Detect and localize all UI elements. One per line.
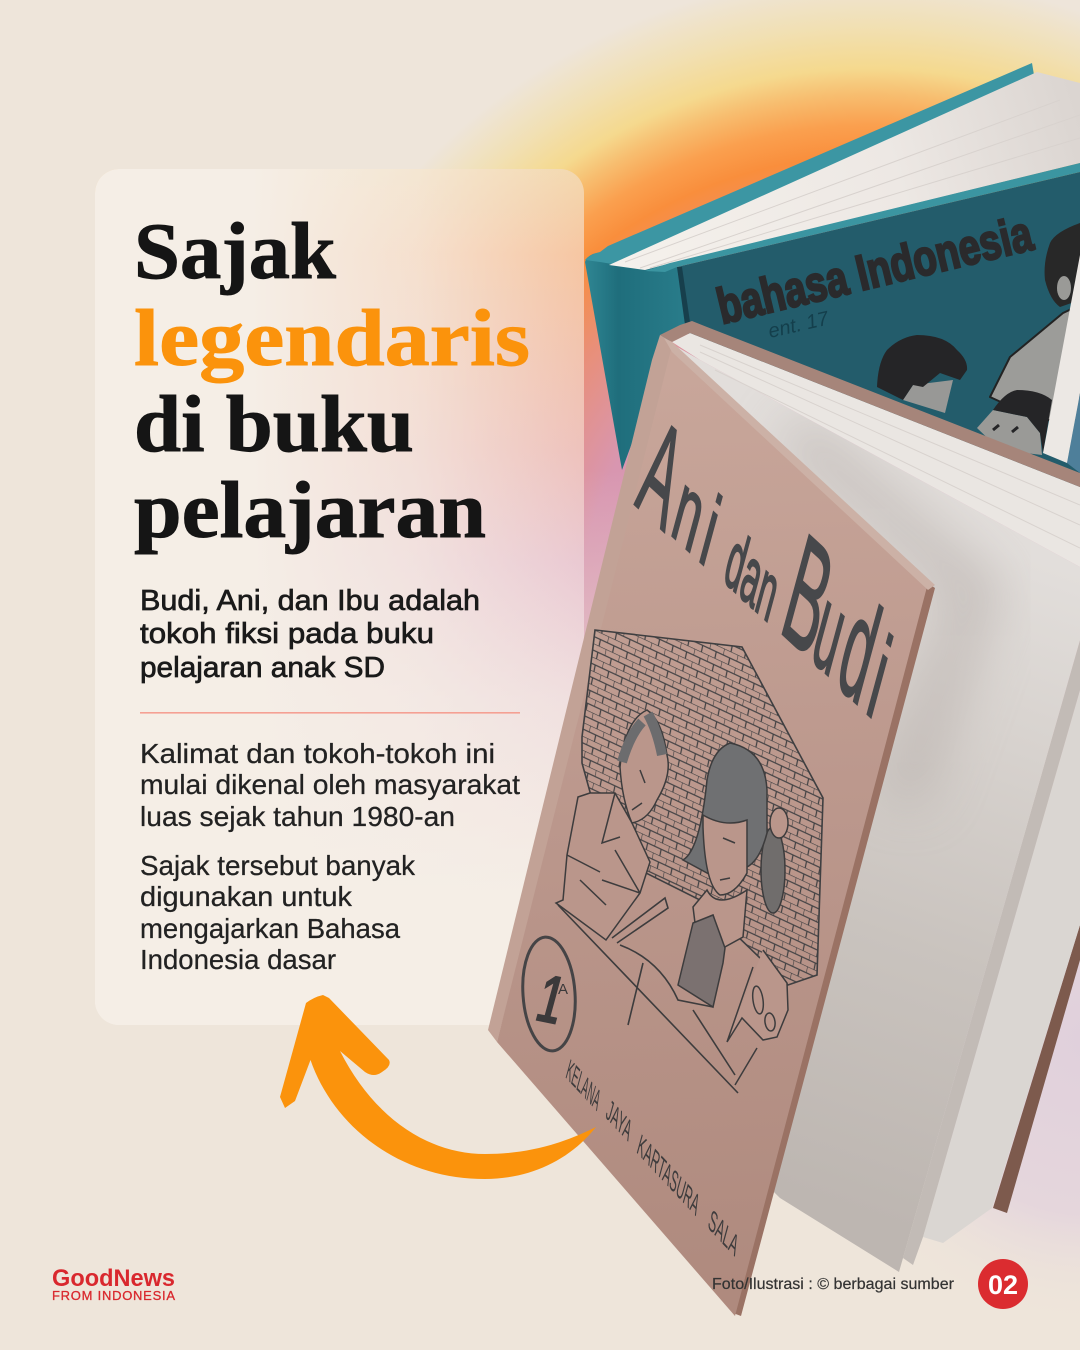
- teal book spine: [585, 250, 688, 470]
- logo: GoodNews: [52, 1265, 175, 1292]
- illustration: child one: [877, 335, 967, 413]
- teal book front cover: [677, 172, 1080, 500]
- cover badge 1A: [519, 935, 579, 1053]
- text block: usage: digunakan untuk: [140, 881, 353, 912]
- text block: history: [140, 738, 520, 832]
- cover publisher: KELANA: [563, 1053, 604, 1117]
- cover badge 1A: A: [558, 981, 568, 998]
- cover title: d: [826, 564, 893, 736]
- blue edge of another book: [1067, 393, 1080, 473]
- cover illustration: girl: [678, 743, 788, 1085]
- text block: intro: pelajaran anak SD: [140, 652, 385, 684]
- teal book page block: [609, 72, 1080, 270]
- logo: [52, 1265, 175, 1303]
- text block: history: luas sejak tahun 1980-an: [140, 801, 455, 832]
- teal book back strip: [585, 63, 1034, 264]
- teal book cover lip: [645, 163, 1080, 272]
- white sliver of another book: [1043, 255, 1080, 463]
- text block: intro: Budi, Ani, dan Ibu adalah: [140, 585, 480, 617]
- cover publisher: JAYA: [603, 1093, 635, 1148]
- cover illustration: boy: [556, 710, 668, 940]
- text block: usage: [140, 850, 416, 975]
- heading: di buku: [134, 381, 414, 469]
- illustration: child two: [977, 390, 1052, 455]
- cover title: i: [857, 610, 902, 745]
- cover title: n: [664, 448, 715, 575]
- photo credit: Foto/Ilustrasi : © berbagai sumber: [712, 1276, 954, 1293]
- image: teal book Bahasa Indonesia: [585, 63, 1080, 500]
- book back cover edge: [993, 925, 1080, 1213]
- book page stack side: [923, 690, 1080, 1243]
- text block: usage: Indonesia dasar: [140, 944, 336, 975]
- heading: Sajak: [134, 208, 337, 296]
- cover title: u: [802, 557, 858, 702]
- book cover: [497, 346, 928, 1316]
- cover title: i: [692, 474, 729, 588]
- book right edge: [733, 582, 935, 1316]
- cover badge 1A: 1: [529, 959, 573, 1039]
- image: pink book Ani dan Budi: [488, 321, 1080, 1316]
- text block: intro: tokoh fiksi pada buku: [140, 618, 434, 650]
- book spine strip: [488, 335, 678, 1042]
- cover title: A: [626, 386, 697, 561]
- cover title: [626, 386, 902, 745]
- cover illustration: table and book: [558, 898, 738, 1093]
- page number badge: [978, 1259, 1028, 1309]
- book page stack shadow strip: [899, 640, 1080, 1272]
- cover publisher: [563, 1053, 742, 1263]
- cover publisher: KARTASURA: [634, 1128, 703, 1222]
- text block: usage: mengajarkan Bahasa: [140, 913, 400, 944]
- arrow: [280, 995, 596, 1179]
- teal book spine gap: [677, 267, 690, 325]
- heading: legendaris: [134, 295, 530, 383]
- cover illustration: brick wall: [582, 630, 823, 985]
- illustration: adult figure: [990, 223, 1080, 420]
- page number badge: 02: [988, 1270, 1018, 1300]
- book back cover top edge: [660, 321, 1080, 487]
- text block: history: mulai dikenal oleh masyarakat: [140, 769, 520, 800]
- cover title: B: [770, 500, 847, 692]
- text block: history: Kalimat dan tokoh-tokoh ini: [140, 738, 495, 769]
- heading: [134, 208, 530, 555]
- cover top lip: [664, 338, 935, 590]
- cover publisher: SALA: [705, 1203, 742, 1263]
- book page face: [672, 344, 1080, 1272]
- book page shadow: [790, 430, 975, 800]
- logo: FROM INDONESIA: [52, 1288, 175, 1303]
- cover title: dan: [718, 514, 787, 640]
- book top page edges: [672, 333, 1080, 567]
- text block: intro: [140, 585, 480, 684]
- text block: usage: Sajak tersebut banyak: [140, 850, 416, 881]
- teal book handwriting: ent. 17: [766, 307, 832, 343]
- heading: pelajaran: [134, 467, 486, 555]
- panel: text card: [95, 169, 584, 1025]
